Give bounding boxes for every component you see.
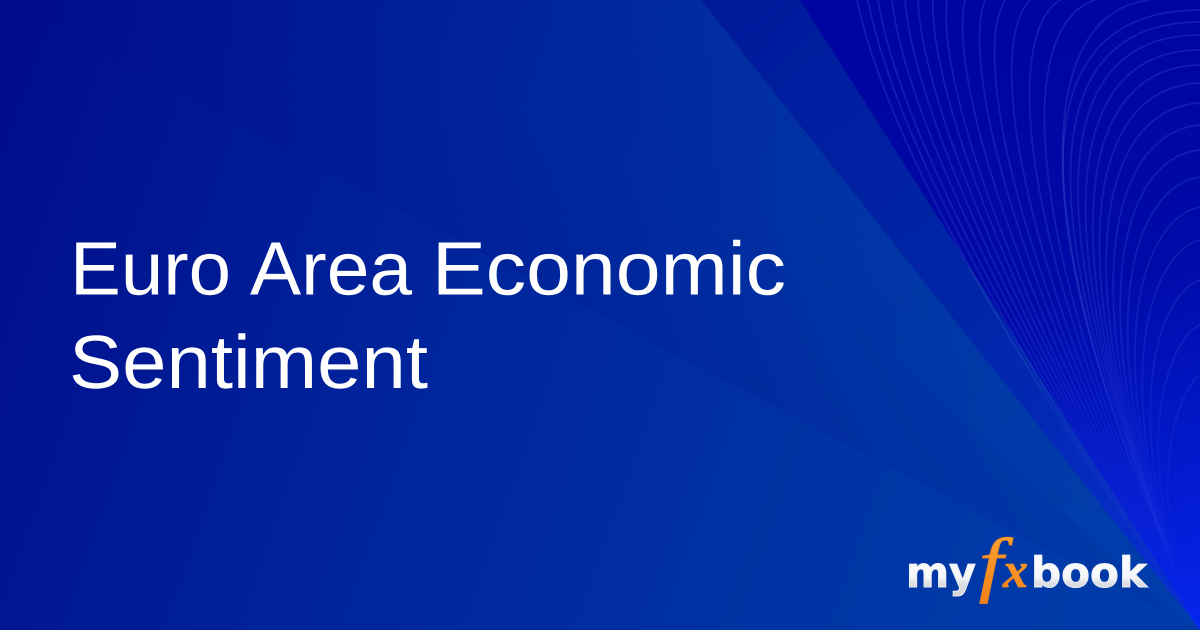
title: Euro: [70, 226, 231, 310]
title: Sentiment: [69, 320, 428, 404]
myfxbook logo: f: [979, 524, 1014, 604]
myfxbook logo: book: [1031, 548, 1148, 597]
title: Area: [250, 226, 412, 310]
corner wedge with curved lines: [800, 0, 1200, 630]
myfxbook logo: [906, 524, 1148, 604]
myfxbook logo: x: [1002, 542, 1028, 598]
title: Economic: [432, 226, 786, 310]
background band: darker ray next to corner wedge: [701, 0, 1200, 630]
background band: lighter middle ray: [515, 0, 1200, 630]
title: [69, 226, 786, 404]
myfxbook logo: my: [906, 548, 976, 597]
